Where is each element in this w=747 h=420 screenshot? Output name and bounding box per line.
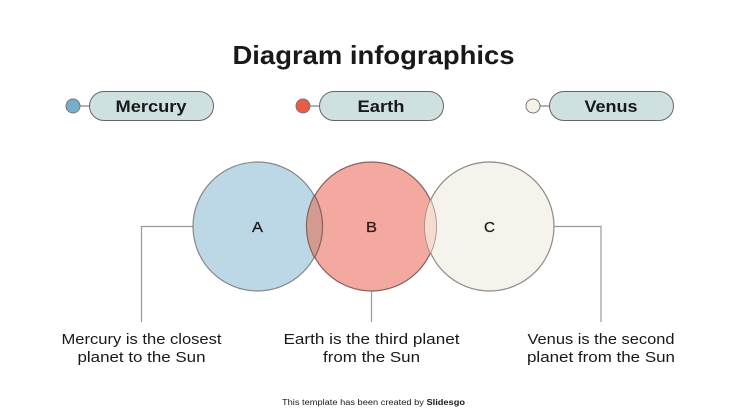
- description: Mercury: planet to the Sun: [78, 349, 206, 366]
- legend item: Earth: Earth: [358, 97, 404, 116]
- description: Mercury: Mercury is the closest: [62, 331, 222, 348]
- circle B: B: [366, 219, 377, 236]
- description: Venus: planet from the Sun: [527, 349, 675, 366]
- description: Earth: Earth is the third planet: [284, 331, 460, 348]
- circle A: A: [252, 219, 263, 236]
- footer credit: This template has been created by Slidesgo: [282, 398, 465, 407]
- title: Diagram infographics: [232, 40, 514, 70]
- legend item: Mercury: [66, 92, 214, 120]
- circle A: [193, 162, 322, 291]
- description: Venus: [527, 331, 675, 366]
- legend item: Earth: [296, 92, 444, 120]
- description: Earth: [284, 331, 460, 366]
- overlap B and C: [424, 199, 437, 254]
- legend item: Venus: Venus: [584, 97, 638, 116]
- overlap A and B: [306, 195, 323, 258]
- description: Earth: from the Sun: [323, 349, 420, 366]
- circle C: C: [484, 219, 495, 236]
- circle C: [425, 162, 554, 291]
- connector: A to Mercury text: [142, 226, 193, 322]
- venn diagram: [193, 162, 554, 291]
- connector: C to Venus text: [554, 226, 601, 322]
- legend item: Venus: [526, 92, 674, 120]
- description: Mercury: [62, 331, 222, 366]
- circle B: [307, 162, 436, 291]
- description: Venus: Venus is the second: [528, 331, 674, 348]
- legend item: Mercury: Mercury: [116, 97, 187, 116]
- connector: B to Earth text: [370, 291, 372, 322]
